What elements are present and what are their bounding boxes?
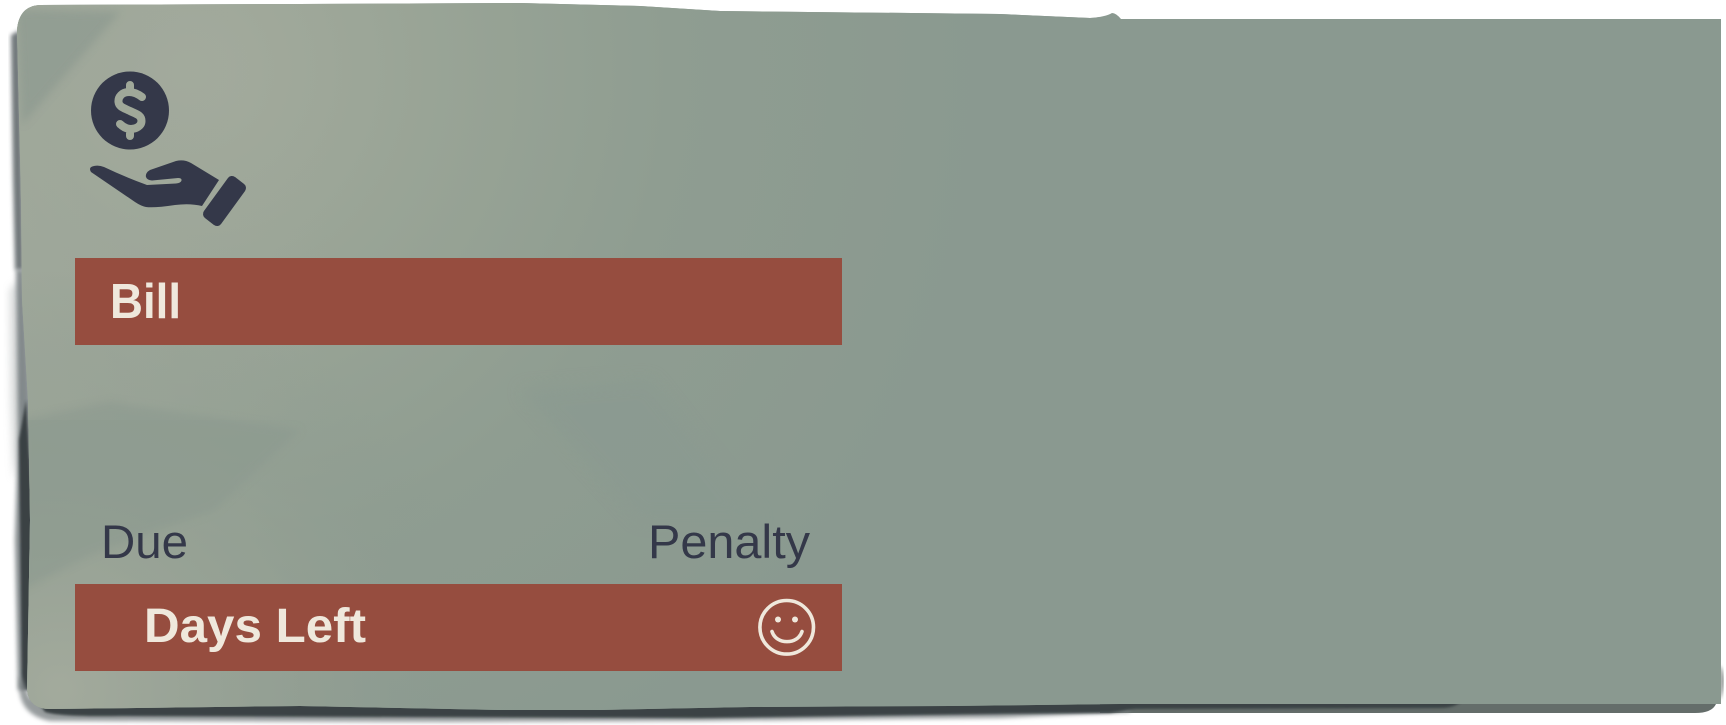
shadow: upper left stroke (11, 30, 24, 270)
icon: smiley (760, 600, 814, 654)
shadow: lower left stroke (15, 270, 34, 690)
icon: hand holding dollar coin (90, 72, 241, 221)
icon part: coin (91, 72, 169, 150)
heading: Bill: Bill (110, 275, 181, 329)
bar: Bill (75, 258, 842, 345)
label: Due: Due (101, 515, 188, 568)
icon part: hand (90, 160, 241, 221)
bar: Days Left (75, 584, 842, 671)
heading: Days Left: Days Left (144, 600, 366, 653)
panel patch: left band (29, 409, 126, 580)
shadow: lower right strip (1100, 698, 1721, 713)
panel patch: top left corner (18, 11, 114, 117)
shadow: bottom dark core (35, 698, 1464, 718)
shadow: bottom stroke (19, 675, 1130, 722)
label: Penalty: Penalty (648, 515, 811, 568)
shadow: wispy left halo (10, 280, 24, 480)
